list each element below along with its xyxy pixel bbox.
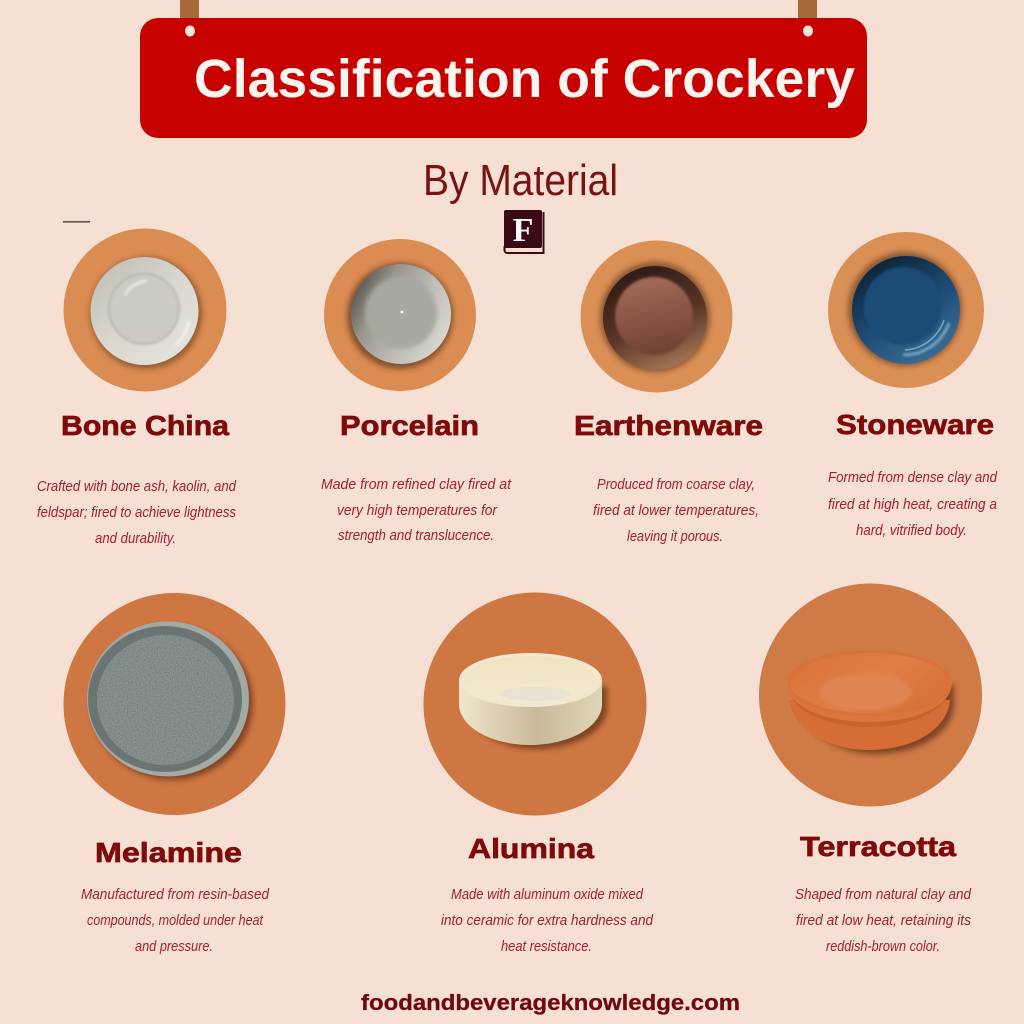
description: Made from refined clay fired at — [321, 476, 512, 493]
description: into ceramic for extra hardness and — [441, 912, 654, 929]
heading: Stoneware — [836, 409, 994, 440]
description: fired at low heat, retaining its — [796, 912, 971, 929]
footer url: foodandbeverageknowledge.com — [361, 990, 740, 1015]
description: Shaped from natural clay and — [795, 886, 972, 903]
panel: melamine — [64, 593, 286, 955]
subtitle: By Material — [423, 156, 618, 205]
hole left — [185, 26, 195, 36]
logo: book F — [504, 210, 544, 253]
heading: Bone China — [61, 410, 229, 441]
title banner — [140, 0, 867, 138]
alumina disc — [424, 592, 646, 816]
description: compounds, molded under heat — [87, 912, 264, 929]
melamine disc — [64, 593, 286, 815]
description: leaving it porous. — [627, 528, 723, 545]
panel: porcelain — [321, 239, 512, 544]
hanging strap right — [798, 0, 817, 20]
description: hard, vitrified body. — [856, 522, 967, 539]
hanging strap left — [180, 0, 199, 20]
icon: alumina bowl — [459, 653, 607, 749]
panel: stoneware — [828, 232, 998, 539]
description: fired at lower temperatures, — [593, 502, 759, 519]
description: very high temperatures for — [337, 502, 498, 519]
description: strength and translucence. — [338, 527, 494, 544]
icon: earthenware plate — [600, 262, 710, 372]
icon: melamine plate — [87, 622, 253, 780]
description: and durability. — [95, 530, 176, 547]
earthenware disc — [580, 240, 732, 392]
heading: Terracotta — [800, 831, 956, 862]
description: Formed from dense clay and — [828, 469, 998, 486]
heading: Earthenware — [574, 410, 763, 441]
hole right — [803, 26, 813, 36]
description: Manufactured from resin-based — [81, 886, 270, 903]
description — [37, 478, 237, 547]
panel: alumina — [424, 592, 654, 955]
description: heat resistance. — [501, 938, 592, 955]
description: and pressure. — [135, 938, 213, 955]
banner board — [140, 18, 867, 138]
heading: Porcelain — [340, 410, 479, 441]
stray mark — [63, 221, 90, 223]
panel: terracotta — [759, 584, 982, 955]
description: Made with aluminum oxide mixed — [451, 886, 644, 903]
icon: stoneware bowl — [848, 252, 962, 366]
icon: terracotta bowls — [787, 650, 954, 754]
description — [441, 886, 654, 955]
heading: Melamine — [95, 837, 242, 868]
title: Classification of Crockery — [194, 49, 855, 109]
description: feldspar; fired to achieve lightness — [37, 504, 236, 521]
description — [321, 476, 512, 544]
terracotta disc — [759, 584, 982, 806]
panel: earthenware — [574, 240, 763, 545]
description — [795, 886, 972, 955]
bone china disc — [64, 228, 226, 392]
description — [593, 476, 759, 545]
icon: bone china plate — [90, 257, 202, 369]
description: fired at high heat, creating a — [828, 496, 997, 513]
description — [81, 886, 270, 955]
heading: Alumina — [468, 833, 594, 864]
description — [828, 469, 998, 539]
description: Crafted with bone ash, kaolin, and — [37, 478, 237, 495]
stoneware disc — [828, 232, 984, 388]
logo: book F: F — [513, 212, 533, 249]
panel: bone china — [37, 228, 237, 547]
description: Produced from coarse clay, — [597, 476, 755, 493]
icon: porcelain plate — [347, 263, 453, 369]
description: reddish-brown color. — [826, 938, 940, 955]
porcelain disc — [324, 239, 476, 391]
